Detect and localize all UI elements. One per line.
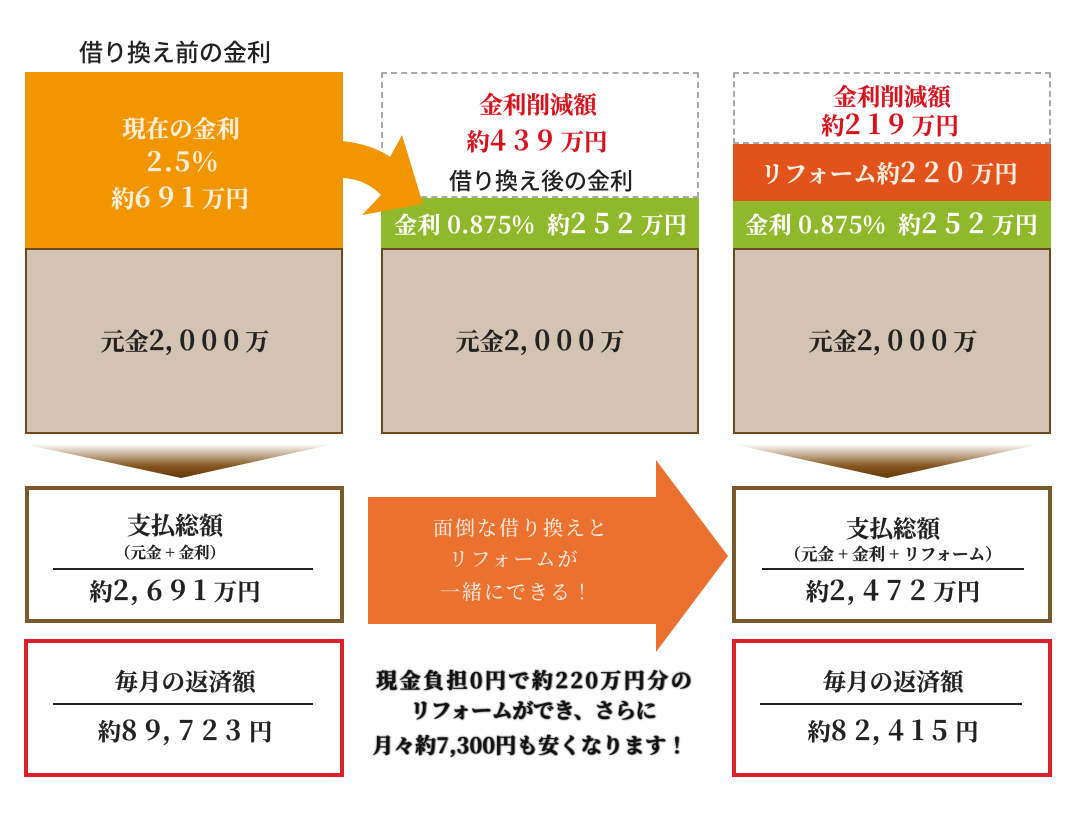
panel: total left	[25, 486, 344, 623]
text: reform: リフォーム約220万円	[760, 151, 1018, 190]
text: arrow line 3: 一緒にできる！	[440, 576, 594, 605]
icon: down chevrons	[30, 445, 1034, 478]
text: principal right: 元金2,000万	[809, 319, 977, 358]
text: total right: 支払総額	[846, 510, 940, 544]
heading: before refinancing: 借り換え前の金利	[79, 33, 271, 68]
panel: current interest	[25, 72, 343, 249]
text: current interest amount: 約691万円	[111, 176, 249, 215]
text: benefit line 2: リフォームができ、さらに	[410, 695, 656, 725]
panel: reform	[733, 144, 1051, 201]
panel: total right	[732, 486, 1052, 623]
text: total left amount: 約2,691万円	[89, 569, 261, 608]
text: after refinancing: 借り換え後の金利	[449, 162, 633, 196]
panel: interest right	[733, 201, 1051, 249]
panel: principal middle	[381, 248, 699, 434]
text: savings right label: 金利削減額	[833, 78, 951, 112]
divider: total right	[762, 568, 1024, 570]
panel: principal left	[25, 248, 343, 434]
text: monthly left amount: 約89,723円	[98, 709, 272, 748]
text: monthly left: 毎月の返済額	[114, 663, 256, 697]
text: savings middle amount: 約439万円	[466, 119, 608, 158]
text: total right amount: 約2,472万円	[806, 569, 980, 608]
text: benefit line 3: 月々約7,300円も安くなります！	[372, 730, 688, 760]
text: arrow line 2: リフォームが	[448, 543, 580, 572]
divider: monthly right	[760, 703, 1022, 705]
text: monthly right: 毎月の返済額	[822, 663, 964, 697]
text: total right breakdown: （元金 + 金利 + リフォーム）	[784, 541, 1002, 565]
text: arrow line 1: 面倒な借り換えと	[433, 512, 609, 541]
text: savings middle label: 金利削減額	[479, 86, 597, 120]
text: total left breakdown: （元金 + 金利）	[115, 541, 225, 563]
panel: monthly left	[24, 639, 344, 777]
panel: savings middle	[381, 72, 699, 198]
text: interest right: 金利 0.875% 約252万円	[745, 202, 1038, 241]
text: interest middle: 金利 0.875% 約252万円	[394, 202, 687, 241]
text: monthly right amount: 約82,415円	[807, 709, 979, 748]
text: savings right amount: 約219万円	[821, 103, 959, 142]
panel: interest middle	[381, 198, 699, 249]
arrow: large orange	[368, 460, 728, 652]
text: principal left: 元金2,000万	[101, 319, 269, 358]
text: benefit line 1: 現金負担0円で約220万円分の	[376, 665, 694, 695]
divider: total left	[53, 568, 313, 570]
panel: monthly right	[732, 639, 1052, 777]
arrow: orange curved	[343, 135, 423, 215]
panel: savings right	[733, 72, 1051, 144]
panel: principal right	[733, 248, 1051, 434]
text: total left: 支払総額	[127, 506, 223, 541]
text: principal middle: 元金2,000万	[456, 319, 624, 358]
divider: monthly left	[53, 703, 313, 705]
text: current interest label: 現在の金利	[122, 110, 240, 144]
text: current rate: 2.5%	[147, 142, 219, 179]
